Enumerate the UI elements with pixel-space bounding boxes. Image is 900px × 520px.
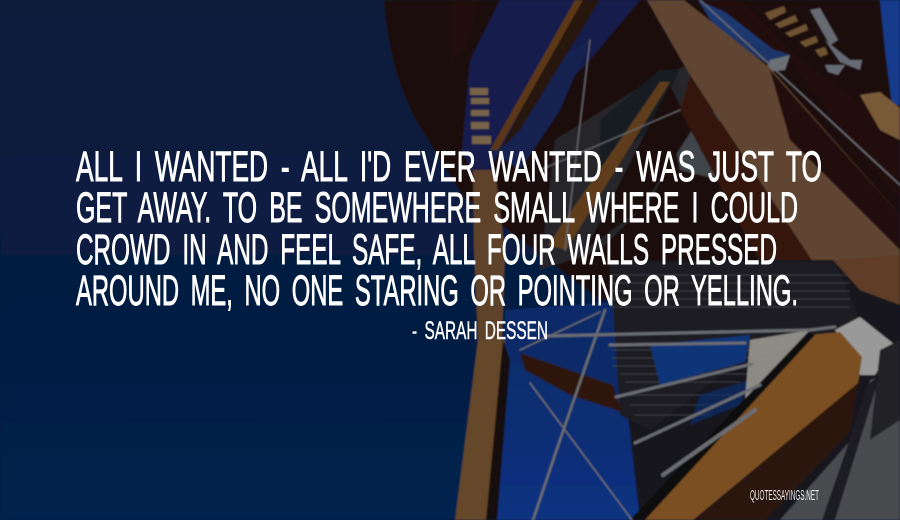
- author attribution: - SARAH DESSEN: [412, 317, 548, 345]
- quote text: [76, 143, 822, 315]
